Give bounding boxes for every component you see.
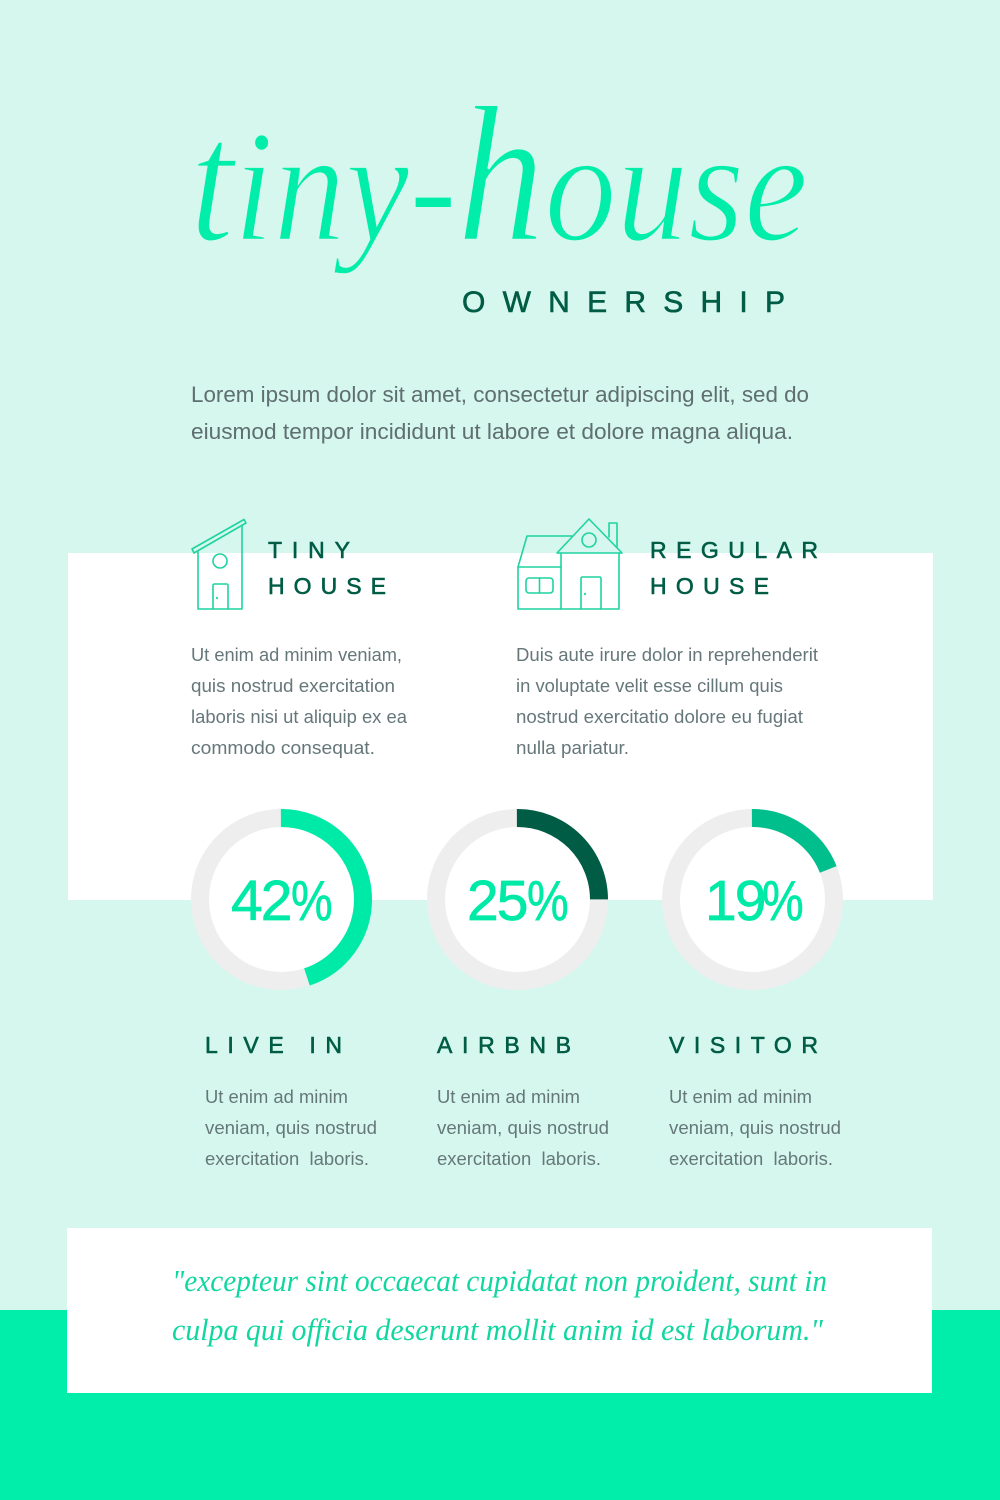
chart: 25% airbnb: % <box>527 869 567 933</box>
text: regular house description: Duis aute irure dolor in reprehenderit <box>516 644 818 665</box>
title: tiny-house <box>190 67 808 283</box>
column: live in: veniam, quis nostrud <box>205 1117 377 1138</box>
column: visitor: veniam, quis nostrud <box>669 1117 841 1138</box>
text: regular house description: in voluptate velit esse cillum quis <box>516 675 783 696</box>
column: live in: Ut enim ad minim <box>205 1086 348 1107</box>
column: live in <box>205 1032 377 1169</box>
panel: regular house <box>516 519 818 758</box>
heading: tiny house <box>268 537 386 599</box>
intro text <box>191 382 809 444</box>
chart: 25% airbnb: 25 <box>467 869 526 933</box>
icon: regular house <box>518 519 622 609</box>
chart: 19% visitor: % <box>762 869 802 933</box>
heading: tiny house: HOUSE <box>268 573 386 599</box>
chart: 42% live in <box>200 818 363 981</box>
panel: tiny house <box>191 520 408 758</box>
heading: regular house: HOUSE <box>650 573 769 599</box>
column: airbnb <box>437 1032 609 1169</box>
quote panel: "excepteur sint occaecat cupidatat non proident, sunt in <box>172 1263 827 1298</box>
heading: regular house: REGULAR <box>650 537 818 563</box>
heading: tiny house: TINY <box>268 537 350 563</box>
text: tiny house description: laboris nisi ut aliquip ex ea <box>191 706 408 727</box>
title: OWNERSHIP <box>462 286 785 319</box>
chart: 25% airbnb <box>436 818 599 981</box>
text: tiny house description: quis nostrud exercitation <box>191 675 395 696</box>
column: visitor <box>669 1032 841 1169</box>
chart: 42% live in: 42 <box>231 869 290 933</box>
intro text: eiusmod tempor incididunt ut labore et dolore magna aliqua. <box>191 419 793 444</box>
quote panel: culpa qui officia deserunt mollit anim id est laborum." <box>172 1312 824 1347</box>
column: airbnb: exercitation laboris. <box>437 1148 601 1169</box>
chart: 19% visitor <box>671 818 834 981</box>
column: airbnb: Ut enim ad minim <box>437 1086 580 1107</box>
text: tiny house description: commodo consequat. <box>191 737 375 758</box>
text: tiny house description: Ut enim ad minim veniam, <box>191 644 402 665</box>
intro text: Lorem ipsum dolor sit amet, consectetur adipiscing elit, sed do <box>191 382 809 407</box>
chart: 42% live in: % <box>291 869 331 933</box>
text: regular house description <box>516 644 818 758</box>
chart: 19% visitor: 19 <box>705 869 764 933</box>
column: live in: LIVE IN <box>205 1032 342 1058</box>
text: regular house description: nulla pariatur. <box>516 737 629 758</box>
icon: tiny house <box>192 520 246 609</box>
quote panel <box>67 1228 932 1393</box>
text: regular house description: nostrud exercitatio dolore eu fugiat <box>516 706 803 727</box>
text: tiny house description <box>191 644 408 758</box>
white panel behind comparison <box>68 553 933 900</box>
column: airbnb: veniam, quis nostrud <box>437 1117 609 1138</box>
heading: regular house <box>650 537 818 599</box>
bottom green band <box>0 1310 1000 1500</box>
column: live in: exercitation laboris. <box>205 1148 369 1169</box>
column: visitor: Ut enim ad minim <box>669 1086 812 1107</box>
column: visitor: VISITOR <box>669 1032 818 1058</box>
column: airbnb: AIRBNB <box>437 1032 571 1058</box>
column: visitor: exercitation laboris. <box>669 1148 833 1169</box>
